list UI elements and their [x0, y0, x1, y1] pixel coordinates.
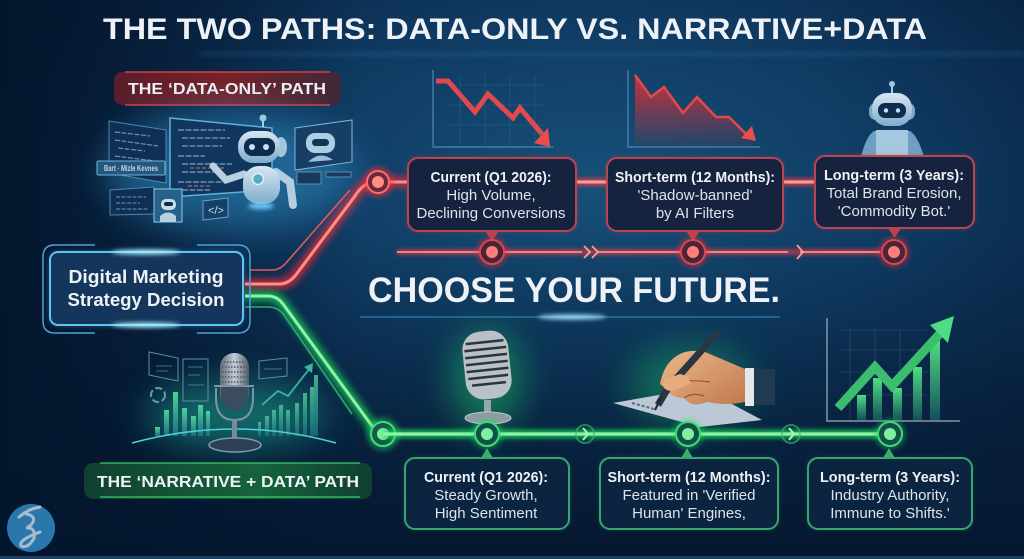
decision box: Strategy Decision [68, 290, 224, 310]
red box: long-term: 'Commodity Bot.' [838, 203, 950, 220]
green node start [367, 418, 399, 450]
horizon [132, 429, 336, 443]
label: narrative + data path: THE ‘NARRATIVE + DATA’ PATH [97, 474, 359, 491]
red timeline [397, 228, 909, 267]
label: narrative + data path [84, 463, 372, 499]
illustration: robot with code screens [97, 110, 355, 230]
bars right [258, 375, 318, 436]
chart: rising growth [827, 316, 960, 421]
trend arrow [262, 368, 310, 405]
red box: current: Declining Conversions [416, 205, 566, 222]
red box: long-term [815, 156, 974, 228]
green box: current: Current (Q1 2026): [424, 469, 548, 486]
red box: long-term: Total Brand Erosion, [826, 185, 962, 202]
icon: hand signing with pen [613, 332, 775, 427]
code tag card: </> [208, 205, 224, 217]
green box: long-term: Industry Authority, [831, 487, 949, 504]
mini robot card [154, 189, 182, 222]
node: red start [363, 167, 393, 197]
red box: short-term: by AI Filters [656, 205, 734, 222]
green box: current: Steady Growth, [434, 487, 538, 504]
title: THE TWO PATHS: DATA-ONLY VS. NARRATIVE+DATA [103, 13, 927, 46]
node: current [477, 237, 507, 267]
illustration: studio mic with data [132, 352, 336, 452]
green box: current: High Sentiment [435, 505, 538, 522]
green box: long-term: Immune to Shifts.' [830, 505, 950, 522]
code screen left lower [110, 187, 154, 215]
red box: current [408, 158, 576, 231]
red box: current: Current (Q1 2026): [430, 169, 552, 186]
red box: short-term: Short-term (12 Months): [615, 169, 775, 186]
green box: short-term: Featured in 'Verified [623, 487, 755, 504]
label: data-only path: THE ‘DATA-ONLY’ PATH [128, 81, 326, 98]
green box: short-term [600, 458, 778, 529]
node: long-term [875, 419, 905, 449]
microphone icon: vintage [451, 329, 523, 430]
icon: commodity robot [861, 81, 924, 157]
top glow line under title [200, 53, 1024, 55]
decision box [43, 245, 250, 333]
heading: choose your future: CHOOSE YOUR FUTURE. [368, 271, 780, 310]
red box: current: High Volume, [446, 187, 536, 204]
node: short-term [678, 237, 708, 267]
green path: strategy to current [245, 296, 388, 434]
node: current [472, 419, 502, 449]
label: data-only path [114, 72, 341, 105]
node: short-term [673, 419, 703, 449]
node: long-term [879, 237, 909, 267]
right robot screen [295, 120, 352, 184]
chevron nodes [576, 425, 800, 443]
green box: current [405, 458, 569, 529]
main robot [213, 114, 293, 209]
connectors between red boxes [576, 178, 815, 186]
red box: short-term: 'Shadow-banned' [638, 187, 753, 204]
logo badge [7, 504, 55, 552]
red box: long-term: Long-term (3 Years): [824, 167, 964, 184]
glow divider [360, 314, 780, 320]
green box: long-term: Long-term (3 Years): [820, 469, 960, 486]
code screen left top [109, 121, 166, 183]
data panels [149, 352, 287, 401]
code tag card [203, 198, 228, 220]
red path: strategy to current [245, 167, 410, 284]
decision box: Digital Marketing [68, 267, 224, 287]
green box: short-term: Human' Engines, [632, 505, 746, 522]
keyword tag: Bart · Mizle Kevnes [104, 164, 158, 173]
keyword tag [97, 161, 165, 175]
chart: declining line [433, 70, 553, 147]
green box: short-term: Short-term (12 Months): [608, 469, 770, 486]
code screen centre [170, 118, 272, 197]
chart: declining area [628, 70, 760, 147]
green box: long-term [808, 458, 972, 529]
red box: short-term [607, 158, 783, 231]
green timeline [383, 419, 905, 458]
ring gauge [151, 388, 165, 402]
microphone [209, 353, 261, 452]
bars left [155, 392, 210, 436]
